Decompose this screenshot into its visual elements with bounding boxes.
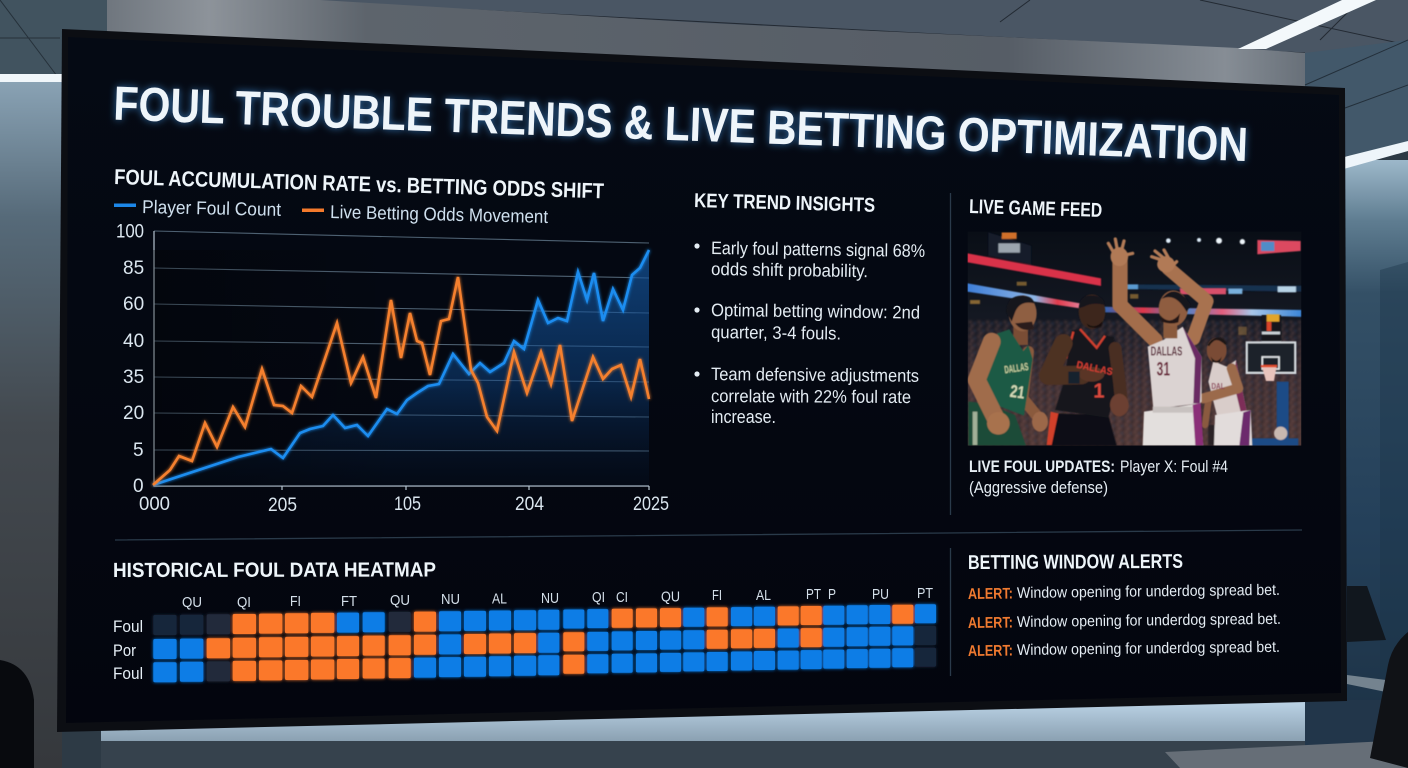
y axis labels: 0 [133, 476, 144, 497]
y axis labels: 40 [123, 331, 144, 352]
player in white jersey with raised arms [1108, 239, 1207, 446]
live foul updates text: Player X: Foul #4 [1120, 457, 1228, 476]
alert 2: ALERT: [968, 614, 1013, 632]
heatmap column labels: QU [182, 594, 202, 611]
insight 1: Early foul patterns signal 68% [711, 238, 925, 261]
heatmap column labels: PT [806, 586, 821, 603]
heatmap row labels [113, 617, 143, 683]
heatmap column labels: AL [492, 590, 507, 608]
insight 1: odds shift probability. [711, 259, 868, 281]
y axis labels: 20 [123, 403, 144, 424]
heatmap column labels: PU [872, 586, 889, 603]
heatmap column labels: FI [290, 593, 301, 610]
heatmap column labels: QI [237, 594, 251, 611]
live foul updates text: (Aggressive defense) [969, 478, 1108, 497]
y axis labels [116, 222, 144, 497]
heatmap column labels: CI [616, 589, 628, 606]
panel: historical heatmap [113, 558, 936, 683]
insights heading: KEY TREND INSIGHTS [694, 190, 875, 217]
heatmap column labels: AL [756, 587, 771, 604]
x axis labels: 205 [268, 495, 297, 516]
heatmap row 1 [153, 604, 936, 635]
heatmap row labels: Por [113, 641, 136, 660]
heatmap column labels: NU [441, 591, 460, 608]
legend [114, 196, 548, 227]
insight 3: correlate with 22% foul rate [711, 386, 911, 407]
insight 2 [694, 300, 920, 344]
grid and axes [154, 231, 649, 490]
player foul count line [153, 250, 649, 485]
heatmap row labels: Foul [113, 617, 143, 636]
player in rear white jersey [1203, 338, 1252, 446]
feed heading: LIVE GAME FEED [969, 196, 1102, 222]
alert 1: ALERT: [968, 585, 1013, 603]
game photo illustration [968, 232, 1301, 446]
heatmap column labels: QU [661, 588, 680, 606]
panel: key trend insights [694, 190, 925, 427]
live foul updates text [969, 457, 1228, 497]
x axis labels [139, 494, 669, 516]
alert 2: Window opening for underdog spread bet. [1017, 611, 1281, 631]
panel: betting window alerts [968, 551, 1281, 660]
heatmap heading: HISTORICAL FOUL DATA HEATMAP [113, 558, 436, 582]
heatmap row 3 [153, 648, 936, 682]
insight 3: increase. [711, 407, 776, 427]
heatmap column labels: FI [712, 587, 722, 604]
player in green jersey: 21 [1009, 381, 1026, 403]
hoop [1247, 314, 1298, 446]
y axis labels: 100 [116, 222, 144, 242]
insight 2: Optimal betting window: 2nd [711, 300, 920, 323]
blue area fill [153, 250, 649, 486]
y axis labels: 85 [123, 258, 144, 279]
player in black jersey: DALLAS [1075, 360, 1114, 378]
player in green jersey [968, 295, 1048, 446]
player in green jersey: DALLAS [1004, 361, 1029, 376]
legend: Player Foul Count [142, 196, 281, 220]
player in white jersey with raised arms: 31 [1157, 360, 1170, 381]
heatmap column labels: P [828, 586, 836, 603]
player in black jersey [1047, 294, 1129, 446]
insight 2: quarter, 3-4 fouls. [711, 322, 841, 344]
insight 3: Team defensive adjustments [711, 364, 919, 386]
heatmap row 2 [153, 626, 936, 659]
y axis labels: 5 [133, 440, 144, 461]
alert 1: Window opening for underdog spread bet. [1017, 582, 1280, 602]
raised hands [1108, 239, 1177, 272]
legend: Live Betting Odds Movement [330, 201, 548, 227]
player in rear white jersey: DAL [1211, 382, 1225, 391]
heatmap column labels: NU [541, 590, 559, 607]
y axis labels: 35 [123, 367, 144, 388]
heatmap row labels: Foul [113, 664, 143, 683]
x axis labels: 204 [515, 494, 544, 515]
x axis labels: 2025 [633, 494, 669, 515]
title: FOUL TROUBLE TRENDS & LIVE BETTING OPTIMIZATION [113, 78, 1249, 172]
insight 3 [694, 364, 919, 427]
heatmap column labels: FT [341, 593, 357, 610]
heatmap column labels: QI [592, 589, 605, 606]
insight 1 [694, 238, 925, 281]
panel: foul accumulation chart [114, 165, 669, 516]
player in black jersey: 1 [1093, 381, 1104, 403]
alerts heading: BETTING WINDOW ALERTS [968, 551, 1183, 574]
heatmap column labels: QU [390, 592, 410, 609]
x axis labels: 000 [139, 494, 170, 515]
x axis labels: 105 [394, 494, 421, 515]
alert 3: Window opening for underdog spread bet. [1017, 639, 1280, 659]
live betting odds line [153, 277, 649, 485]
panel: live game feed [968, 196, 1301, 497]
alert 3: ALERT: [968, 642, 1013, 660]
heatmap column labels: PT [917, 585, 933, 602]
live foul updates text: LIVE FOUL UPDATES: [969, 457, 1115, 476]
y axis labels: 60 [123, 294, 144, 315]
player in white jersey with raised arms: DALLAS [1151, 345, 1182, 359]
heatmap column labels [182, 585, 933, 611]
chart heading: FOUL ACCUMULATION RATE vs. BETTING ODDS SHIFT [114, 165, 604, 203]
